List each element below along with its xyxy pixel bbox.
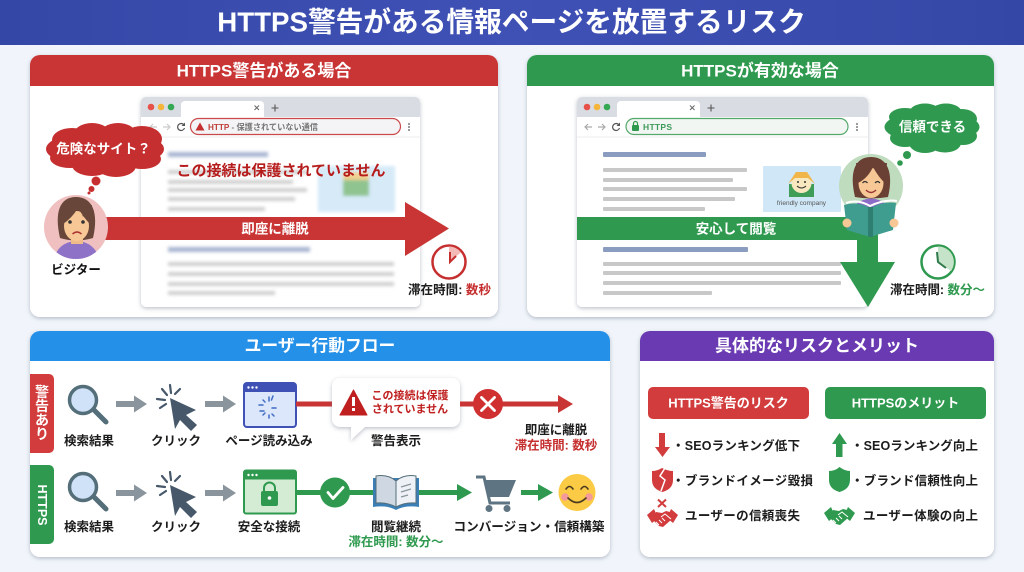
icon: smiley <box>558 474 596 511</box>
panel: HTTPS valid case <box>527 55 994 317</box>
callout: warning: この接続は保護 <box>372 388 448 402</box>
browser window: secure <box>577 97 868 307</box>
icon: cross circle <box>473 389 503 419</box>
browser window: insecure: HTTP - 保護されていない通信 <box>208 122 318 132</box>
friendly company image <box>763 166 841 212</box>
text: loss of trust: ユーザーの信頼喪失 <box>685 508 800 523</box>
side label: warning <box>30 374 54 453</box>
red exit arrow <box>100 202 449 256</box>
thought cloud: danger <box>46 123 164 194</box>
icon: handshake <box>824 507 855 525</box>
icon: click cursor <box>157 472 197 518</box>
label: click: クリック <box>151 434 201 448</box>
label: secure connection: 安全な接続 <box>238 519 301 534</box>
callout: warning: されていません <box>372 402 448 416</box>
avatar: worried visitor <box>44 195 108 259</box>
subheader: risks: HTTPS警告のリスク <box>668 396 789 410</box>
icon: broken handshake <box>647 500 678 527</box>
icon: shield <box>829 467 850 492</box>
side label: warning: 警 <box>35 384 49 400</box>
text: SEO ranking down: ・SEOランキング低下 <box>672 438 800 453</box>
panel: risks and merits <box>640 331 994 557</box>
arrow: gray 1 <box>116 484 147 502</box>
arrow: gray 1 <box>116 396 147 412</box>
label: page loading: ページ読み込み <box>225 433 313 448</box>
thought cloud: trust: 信頼できる <box>899 118 966 134</box>
panel header: warning case <box>30 55 498 86</box>
side label: warning: り <box>35 426 49 442</box>
icon: down arrow <box>655 433 670 457</box>
panel header: risks and merits: 具体的なリスクとメリット <box>715 336 919 356</box>
warning text: この接続は保護されていません <box>176 162 386 180</box>
merit column <box>824 387 986 525</box>
icon: broken shield <box>652 468 673 492</box>
side label: HTTPS <box>30 465 54 544</box>
icon: click cursor <box>157 385 197 431</box>
panel header: flow: ユーザー行動フロー <box>245 336 395 356</box>
risk column <box>647 387 813 527</box>
friendly company image: friendly company <box>777 200 827 207</box>
label: click: クリック <box>151 520 201 534</box>
text: brand image damage: ・ブランドイメージ毀損 <box>672 473 813 488</box>
green arrow to cart <box>418 484 472 501</box>
arrow: gray 2 <box>205 396 236 412</box>
label: dwell minutes: 滞在時間: 数分〜 <box>348 534 444 549</box>
dwell time: seconds: 滞在時間: 数秒 <box>408 282 491 297</box>
icon: magnifier <box>70 386 106 422</box>
icon: magnifier <box>70 474 106 509</box>
label: search results: 検索結果 <box>64 433 114 448</box>
icon: secure window <box>244 470 296 514</box>
label: dwell seconds: 滞在時間: 数秒 <box>515 438 598 452</box>
icon: clock several minutes <box>922 246 954 278</box>
text: SEO ranking up: ・SEOランキング向上 <box>851 438 978 453</box>
page content lines <box>603 152 841 295</box>
dwell time: minutes: 滞在時間: 数分〜 <box>890 282 985 297</box>
blurred page content <box>168 152 395 295</box>
label: immediate exit: 即座に離脱 <box>525 422 588 437</box>
subheader: risks <box>648 387 809 419</box>
avatar: happy reader <box>839 154 903 237</box>
green reading arrow <box>577 217 895 307</box>
panel header: warning case: HTTPS警告がある場合 <box>177 60 351 80</box>
thought cloud: trust <box>884 104 980 166</box>
icon: check circle <box>320 478 350 508</box>
panel header: valid case: HTTPSが有効な場合 <box>681 60 839 80</box>
label: conversion and trust: コンバージョン・信頼構築 <box>454 519 605 534</box>
label: warning shown: 警告表示 <box>371 433 421 448</box>
subheader: merits <box>825 387 986 419</box>
title banner <box>0 0 1024 45</box>
panel header: risks and merits <box>640 331 994 361</box>
icon: cart <box>476 477 516 512</box>
title banner: HTTPS警告がある情報ページを放置するリスク <box>217 6 806 38</box>
browser window: insecure <box>141 97 420 307</box>
panel header: valid case <box>527 55 994 86</box>
side label: HTTPS: HTTPS <box>35 485 49 525</box>
label: search results: 検索結果 <box>64 519 114 534</box>
flow row: HTTPS <box>64 470 605 549</box>
subheader: merits: HTTPSのメリット <box>852 396 959 410</box>
red exit arrow <box>460 395 573 413</box>
icon: loading window <box>244 383 296 427</box>
icon: up arrow <box>832 433 847 457</box>
thought cloud: danger: 危険なサイト？ <box>56 140 151 156</box>
red exit arrow: 即座に離脱 <box>241 220 309 236</box>
label: continue reading: 閲覧継続 <box>371 519 421 534</box>
text: brand trust up: ・ブランド信頼性向上 <box>851 473 978 488</box>
text: better UX: ユーザー体験の向上 <box>863 508 978 523</box>
side label: warning: 告 <box>35 398 49 414</box>
side label: warning: あ <box>35 412 49 428</box>
flow row: warning <box>64 378 598 452</box>
label: visitor: ビジター <box>51 262 101 277</box>
panel header: flow <box>30 331 610 361</box>
icon: clock few seconds <box>432 246 466 278</box>
red connector <box>296 402 336 406</box>
browser window: secure: HTTPS <box>643 122 672 132</box>
panel: HTTPS warning case <box>30 55 498 317</box>
icon: book <box>373 476 419 510</box>
icon: open book <box>842 201 898 237</box>
green reading arrow: 安心して閲覧 <box>696 222 777 236</box>
panel: user behaviour flow <box>30 331 610 557</box>
arrow: gray 2 <box>205 484 236 502</box>
callout: warning <box>332 378 460 440</box>
green arrow to smiley <box>521 484 553 501</box>
green connector <box>296 490 376 495</box>
